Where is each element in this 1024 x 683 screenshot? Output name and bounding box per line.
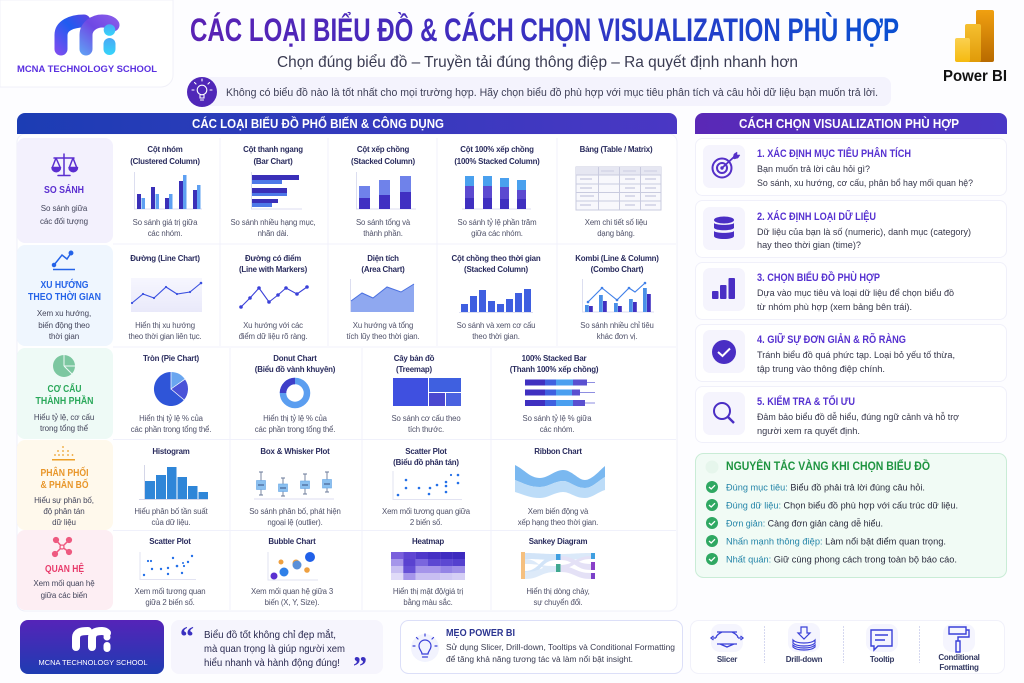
icon: MCNA logo [61,21,116,55]
chart: histogram [134,447,209,527]
chart: line: theo thời gian liên tục. [128,332,202,341]
panel: quote: mà quan trọng là giúp người xem [204,644,345,655]
chart: heatmap: Heatmap [412,537,444,546]
chart: clustered column: (Clustered Column) [130,157,200,166]
tool: tooltip [866,624,898,664]
panel: step 3: 3. CHỌN BIỂU ĐỒ PHÙ HỢP [757,271,880,284]
category: cơ cấu: Hiểu tỷ lệ, cơ cấu [34,413,94,422]
chart: stacked column: So sánh tổng và [356,218,411,227]
chart: 100% stacked bar: (Thanh 100% xếp chồng) [510,365,599,374]
chart: scatter with title: (Biểu đồ phân tán) [393,458,459,467]
rule 5: Nhất quán: Giữ cùng phong cách trong toàn bộ báo cáo. [726,554,957,566]
category: so sánh: các đối tượng [40,217,88,226]
panel: step 5: 5. KIỂM TRA & TỐI ƯU [757,394,855,408]
chart: treemap: tích thước. [408,425,444,434]
chart: box and whisker: So sánh phân bố, phát hiện [249,507,341,516]
chart: histogram: Histogram [152,447,190,456]
chart: sankey: sự chuyển đổi. [533,598,583,607]
chart: line with markers: Đường có điểm [245,254,301,263]
icon: light bulb [187,77,217,107]
chart: treemap [391,354,461,434]
Power BI label: Power BI [943,68,1007,85]
panel: quote: “ [180,622,194,653]
category: xu hướng: biến động theo [38,321,90,330]
chart: scatter with title: Xem mối tương quan giữa [382,507,471,516]
chart: treemap: So sánh cơ cấu theo [391,414,461,423]
category: xu hướng: THEO THỜI GIAN [28,290,101,303]
chart: scatter: Scatter Plot [149,537,191,546]
chart: 100% stacked bar: So sánh tỷ lệ % giữa [523,414,592,423]
chart: stacked column over time: theo thời gian. [472,332,520,341]
chart: bar: nhãn dài. [258,229,288,238]
chart: line: Đường (Line Chart) [130,254,200,263]
chart: donut: các phần trong tổng thể. [255,425,335,434]
chart: ribbon: xếp hạng theo thời gian. [518,518,598,527]
icon: Power BI logo [943,10,1007,85]
chart: scatter [135,537,205,607]
chart: bar: So sánh nhiều hạng mục, [231,218,315,227]
chart: ribbon [515,447,605,527]
tool: slicer [711,624,743,664]
icon: target [712,152,740,178]
panel: Power BI tip: Sử dụng Slicer, Drill-down, Tooltips và Conditional Formatting [446,642,675,652]
panel: Power BI tip [400,620,682,674]
icon: trend line [52,251,75,270]
panel: step 3 [696,262,1006,320]
chart: heatmap: Hiển thị mật độ/giá trị [393,587,464,596]
chart: box and whisker: Box & Whisker Plot [260,447,330,456]
icon: check circle [712,340,736,364]
chart: area: Xu hướng và tổng [353,321,413,330]
chart: ribbon: Xem biến động và [528,507,589,516]
chart: pie: Hiển thị tỷ lệ % của [139,414,204,423]
panel: bottom logo [20,620,164,674]
category: phân phối: PHÂN PHỐI [40,465,89,479]
panel: step 5: Đảm bảo biểu đồ dễ hiểu, đúng ngữ cảnh và hỗ trợ [757,412,960,423]
panel: step 5: người xem ra quyết định. [757,426,860,437]
panel: quote: hiểu nhanh và hành động đúng! [204,657,340,669]
golden rules heading: NGUYÊN TẮC VÀNG KHI CHỌN BIỂU ĐỒ [726,460,930,473]
logo name: MCNA TECHNOLOGY SCHOOL [17,64,157,75]
panel: Power BI tip: để tăng khả năng tương tác và làm nổi bật insight. [446,654,633,664]
chart: stacked column: thành phần. [363,229,403,238]
chart: donut: (Biểu đồ vành khuyên) [255,365,336,374]
chart: table matrix [576,145,661,238]
category: so sánh [17,138,113,243]
chart: 100% stacked bar: các nhóm. [540,425,574,434]
tip banner [187,77,891,107]
panel: step 5 [696,386,1006,442]
chart: table matrix: Xem chi tiết số liệu [585,218,647,227]
tool: slicer: Slicer [717,655,737,664]
panel: Power BI tip: MẸO POWER BI [446,628,515,639]
chart: clustered column: các nhóm. [148,229,182,238]
chart: combo: So sánh nhiều chỉ tiêu [580,321,654,330]
panel: step 3: từ nhóm phù hợp (xem bảng bên trái). [757,302,912,313]
chart: 100% stacked bar [510,354,599,434]
chart: box and whisker: ngoại lệ (outlier). [267,518,323,527]
panel: Power BI tools [690,620,1004,674]
panel: step 1: 1. XÁC ĐỊNH MỤC TIÊU PHÂN TÍCH [757,147,911,160]
heading: how to choose [695,113,1007,134]
chart: area: tích lũy theo thời gian. [346,332,420,341]
chart: sankey: Sankey Diagram [529,537,587,546]
chart: bubble [251,537,333,607]
icon: white logo [76,631,110,652]
chart: combo: (Combo Chart) [591,265,644,274]
chart: 100% stacked column [454,145,540,238]
chart: scatter: Xem mối tương quan [135,587,205,596]
icon: magnifier [714,403,734,423]
panel: step 2: hay theo thời gian (time)? [757,240,861,251]
chart: heatmap: bằng màu sắc. [403,598,453,607]
chart: ribbon: Ribbon Chart [534,447,582,456]
rule 2: Đúng dữ liệu: Chọn biểu đồ phù hợp với cấu trúc dữ liệu. [726,500,958,512]
chart: combo: Kombi (Line & Column) [575,254,659,263]
chart: box and whisker [249,447,341,527]
icon: bulb [411,634,439,662]
chart: donut [255,354,336,434]
category: phân phối [17,440,113,530]
panel: step 3: Dựa vào mục tiêu và loại dữ liệu để chọn biểu đồ [757,288,954,299]
icon: network [52,537,72,557]
category: quan hệ: giữa các biến [41,591,87,600]
category: quan hệ [17,530,113,610]
chart: donut: Hiển thị tỷ lệ % của [263,414,328,423]
tool: drill-down: Drill-down [786,655,823,664]
chart: bubble: Xem mối quan hệ giữa 3 [251,587,333,596]
chart: pie: Tròn (Pie Chart) [143,354,200,363]
category: xu hướng: XU HƯỚNG [40,278,88,291]
panel: chart types [17,113,677,611]
icon: bars [712,278,735,299]
chart: histogram: của dữ liệu. [152,518,190,527]
chart: area: (Area Chart) [361,265,405,274]
icon: distribution dots [52,446,75,460]
icon: scales [52,154,78,176]
chart: scatter with title [382,447,471,527]
panel: golden rules [696,454,1006,578]
tool: conditional formatting: Formatting [939,663,979,672]
panel: step 4: Tránh biểu đồ quá phức tạp. Loại bỏ yếu tố thừa, [757,350,955,361]
category: cơ cấu: THÀNH PHẦN [36,394,94,407]
category: cơ cấu: trong tổng thể [40,424,89,433]
category: cơ cấu [17,348,113,439]
chart: area: Diện tích [367,254,399,263]
chart: stacked column over time [452,254,541,341]
chart: table matrix: dạng bảng. [597,229,635,238]
category: xu hướng: thời gian [49,332,79,341]
category: phân phối: Hiểu sự phân bố, [34,496,94,505]
chart: stacked column [351,145,416,238]
icon: database [714,216,734,239]
chart: pie [131,354,211,434]
rule 3: Đơn giản: Càng đơn giản càng dễ hiểu. [726,518,883,530]
chart: treemap: Cây bản đồ [394,354,435,363]
chart: 100% stacked column: giữa các nhóm. [471,229,523,238]
tool: conditional formatting: Conditional [938,653,980,662]
chart: donut: Donut Chart [273,354,317,363]
panel: step 1 [696,138,1006,196]
chart: line with markers [239,254,309,341]
chart: bar [231,145,315,238]
chart: bubble: biến (X, Y, Size). [265,598,319,607]
chart: line [128,254,202,341]
chart: bar: Cột thanh ngang [243,145,303,154]
panel: step 2: Dữ liệu của bạn là số (numeric), danh mục (category) [757,227,971,238]
panel: step 4: tập trung vào thông điệp chính. [757,364,885,375]
heading: chart types: CÁC LOẠI BIỂU ĐỒ PHỔ BIẾN & CÔNG DỤNG [192,116,444,131]
chart: clustered column: So sánh giá trị giữa [133,218,198,227]
panel: step 1: So sánh, xu hướng, cơ cấu, phân bổ hay mối quan hệ? [757,178,973,189]
category: cơ cấu: CƠ CẤU [48,382,82,395]
tool: drill-down [786,623,823,664]
heading: chart types [17,113,677,134]
subtitle: Chọn đúng biểu đồ – Truyền tải đúng thông điệp – Ra quyết định nhanh hơn [277,53,798,71]
category: phân phối: độ phân tán [43,507,85,516]
panel: quote: ” [353,652,367,683]
rule 4: Nhấn mạnh thông điệp: Làm nổi bật điểm quan trọng. [726,536,946,548]
panel: quote: Biểu đồ tốt không chỉ đẹp mắt, [204,628,336,641]
panel: step 2: 2. XÁC ĐỊNH LOẠI DỮ LIỆU [757,210,876,223]
chart: clustered column [130,145,202,238]
category: so sánh: So sánh giữa [41,204,88,213]
category: xu hướng: Xem xu hướng, [37,309,91,318]
category: so sánh: SO SÁNH [44,183,84,196]
panel: quote [171,620,383,683]
tool: tooltip: Tooltip [870,655,895,664]
category: xu hướng [17,245,113,346]
panel: bottom logo: MCNA TECHNOLOGY SCHOOL [38,658,148,667]
chart: stacked column over time: Cột chồng theo thời gian [452,254,541,263]
chart: 100% stacked column: So sánh tỷ lệ phần trăm [458,218,536,227]
chart: 100% stacked bar: 100% Stacked Bar [522,354,587,363]
chart: combo [575,254,659,341]
chart: combo: khác đơn vị. [597,332,637,341]
chart: scatter with title: Scatter Plot [405,447,447,456]
chart: stacked column over time: So sánh và xem cơ cấu [457,321,535,330]
chart: scatter with title: 2 biến số. [410,518,442,527]
tool: conditional formatting [938,624,980,672]
chart: pie: các phần trong tổng thể. [131,425,211,434]
chart: treemap: (Treemap) [396,365,433,374]
chart: histogram: Hiểu phân bố tần suất [134,507,209,516]
chart: clustered column: Cột nhóm [147,145,183,154]
chart: 100% stacked column: (100% Stacked Column) [454,157,540,166]
category: phân phối: & PHÂN BỐ [40,477,88,491]
chart: table matrix: Bảng (Table / Matrix) [580,145,653,154]
chart: bubble: Bubble Chart [268,537,316,546]
chart: stacked column over time: (Stacked Column) [464,265,529,274]
category: quan hệ: QUAN HỆ [45,562,84,575]
panel: step 4: 4. GIỮ SỰ ĐƠN GIẢN & RÕ RÀNG [757,333,906,346]
chart: stacked column: Cột xếp chồng [357,145,409,154]
chart: line with markers: Xu hướng với các [243,321,303,330]
category: phân phối: dữ liệu [52,518,76,527]
chart: sankey: Hiển thị dòng chảy, [526,587,590,596]
panel: step 4 [696,324,1006,382]
panel: step 2 [696,200,1006,258]
chart: area [346,254,420,341]
chart: line: Hiển thị xu hướng [135,321,195,330]
chart: line with markers: điểm dữ liệu rõ ràng. [239,332,307,341]
heading: how to choose: CÁCH CHỌN VISUALIZATION PHÙ HỢP [739,116,959,131]
chart: heatmap [391,537,465,607]
chart: sankey [521,537,595,607]
category: quan hệ: Xem mối quan hệ [33,579,95,588]
rule 1: Đúng mục tiêu: Biểu đồ phải trả lời đúng câu hỏi. [726,482,925,494]
chart: scatter: giữa 2 biến số. [145,598,195,607]
panel: step 1: Bạn muốn trả lời câu hỏi gì? [757,164,870,175]
icon: pie [53,355,75,377]
chart: line with markers: (Line with Markers) [239,265,308,274]
tip text: Không có biểu đồ nào là tốt nhất cho mọi trường hợp. Hãy chọn biểu đồ phù hợp với mục tiêu phân tích và câu hỏi dữ liệu bạn muốn trả lời. [226,87,878,99]
chart: bar: (Bar Chart) [253,157,293,166]
logo card [0,0,173,87]
chart: stacked column: (Stacked Column) [351,157,416,166]
chart: 100% stacked column: Cột 100% xếp chồng [460,145,534,154]
